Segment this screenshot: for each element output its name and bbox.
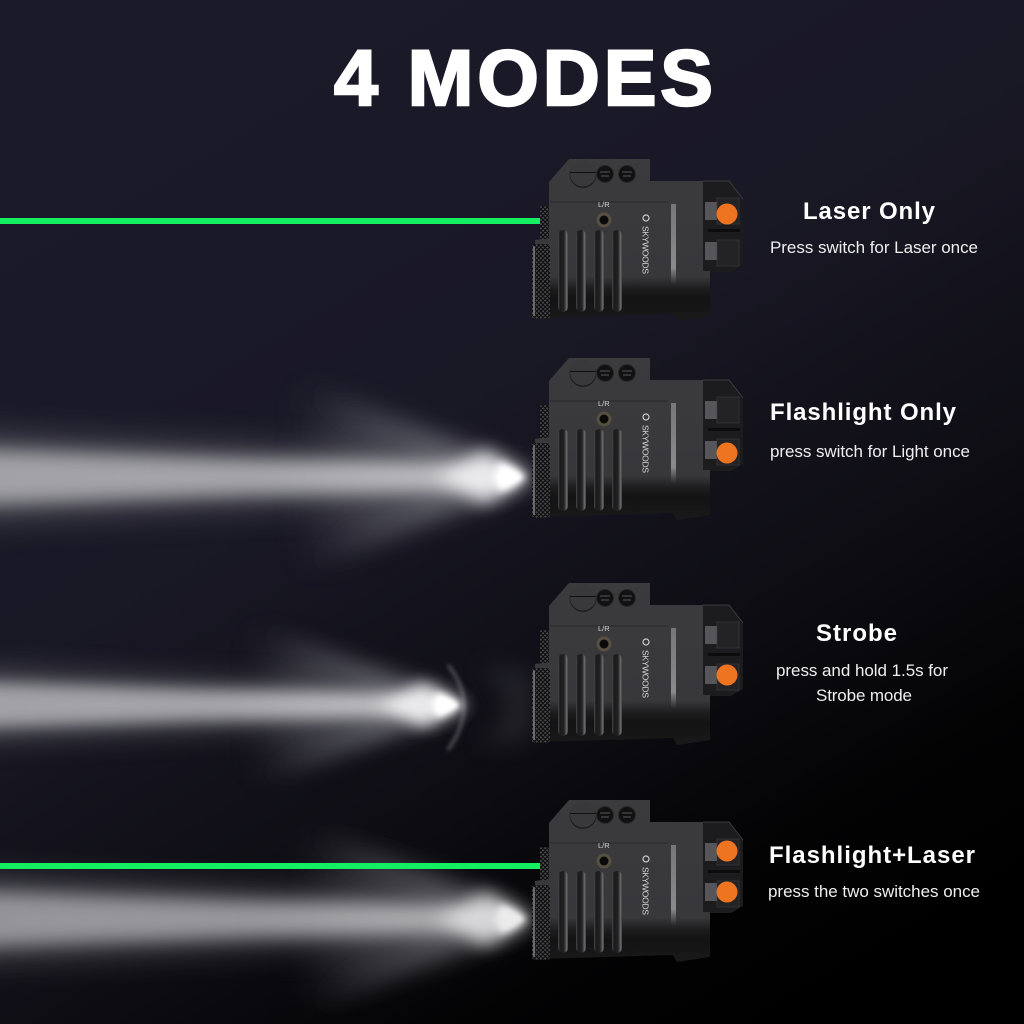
icon: brand sun: [643, 639, 649, 645]
switch indicator: [716, 664, 738, 686]
flashlight beam: mode 4: [0, 827, 533, 1011]
icon: brand sun: [643, 414, 649, 420]
device brand: SKYWOODS: [640, 650, 650, 698]
device: strobe: [532, 583, 743, 745]
device brand: SKYWOODS: [640, 867, 650, 915]
device brand: SKYWOODS: [640, 425, 650, 473]
flashlight beam: mode 2: [0, 385, 532, 569]
lower switch indicator: [716, 882, 738, 902]
laser beam: mode 1: [0, 218, 541, 224]
heading: Flashlight Only: [770, 399, 957, 426]
flashlight beam: mode 3: [0, 627, 530, 783]
switch indicator: [716, 204, 738, 224]
heading: Laser Only: [803, 198, 936, 225]
upper switch indicator: [716, 840, 738, 862]
device: flashlight plus laser: [532, 800, 743, 962]
instruction: Press switch for Laser once: [770, 238, 978, 257]
device label: L/R: L/R: [598, 399, 610, 408]
text block: strobe: [776, 620, 948, 705]
heading: Flashlight+Laser: [769, 842, 975, 869]
laser beam: mode 4: [0, 863, 541, 869]
instruction: press the two switches once: [768, 882, 980, 901]
instruction line 1: press and hold 1.5s for: [776, 661, 948, 680]
icon: brand sun: [643, 215, 649, 221]
icon: brand sun: [643, 856, 649, 862]
title: 4 MODES: [334, 33, 713, 122]
device label: L/R: L/R: [598, 200, 610, 209]
text block: flashlight only: [770, 399, 970, 461]
heading: Strobe: [816, 620, 897, 647]
device: laser only: [532, 159, 743, 321]
text block: flashlight plus laser: [768, 842, 980, 901]
text block: laser only: [770, 198, 978, 257]
device brand: SKYWOODS: [640, 226, 650, 274]
instruction: press switch for Light once: [770, 442, 970, 461]
device: flashlight only: [532, 358, 743, 520]
instruction line 2: Strobe mode: [816, 686, 912, 705]
switch indicator: [716, 442, 738, 464]
device label: L/R: L/R: [598, 624, 610, 633]
device label: L/R: L/R: [598, 841, 610, 850]
